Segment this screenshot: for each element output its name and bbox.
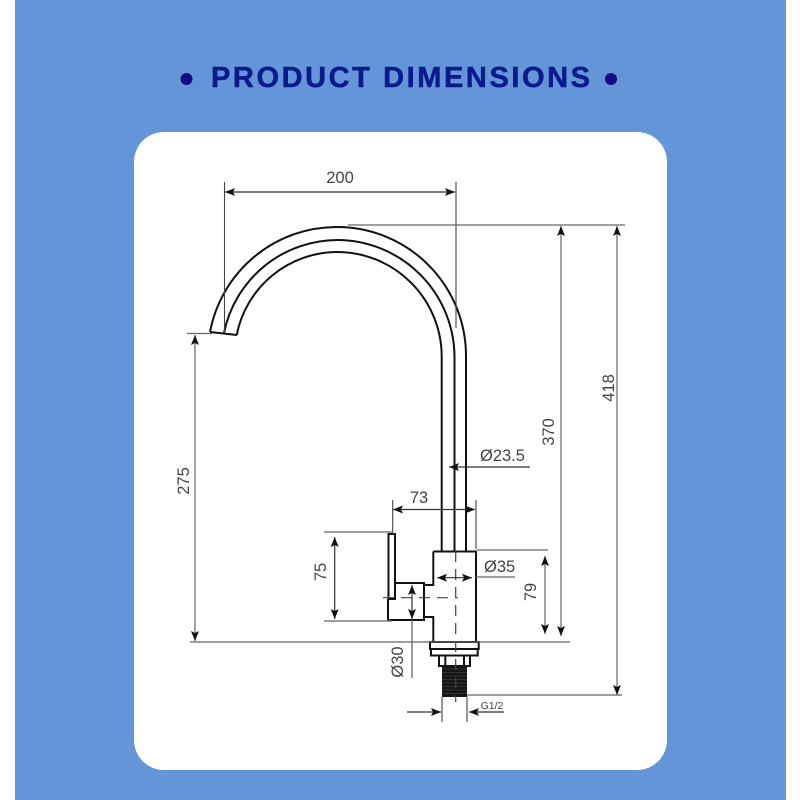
dimension: 79: [477, 550, 548, 634]
panel: drawing card: [134, 132, 667, 770]
dimension: G1/2 thread: G1/2: [481, 700, 504, 712]
dimension: 23.5 diameter: [449, 447, 530, 467]
dimension: 73: [393, 489, 476, 549]
dimension: 79: 79: [522, 583, 540, 601]
dimension: 418 height: 418: [600, 374, 618, 402]
dimension: 30 diameter: [389, 585, 412, 678]
dimension: 75: 75: [312, 563, 330, 581]
dimension: 275 height: [175, 334, 570, 642]
dimension: 30 diameter: Ø30: [389, 646, 407, 678]
faucet spout: [210, 227, 466, 551]
dimension: 35 diameter: [437, 558, 515, 578]
dimension: 75: [312, 532, 392, 621]
dimension: 418 height: [348, 225, 625, 695]
faucet flange: [430, 642, 479, 666]
dimension: 275 height: 275: [175, 467, 193, 495]
faucet body: [388, 552, 476, 642]
threaded connector: [442, 666, 467, 697]
centre lines: [383, 551, 458, 702]
dimension: 200 width: 200: [326, 169, 354, 187]
dimension: 370 height: 370: [540, 418, 558, 446]
dimension: G1/2 thread: [407, 697, 504, 722]
dimension: 200 width: [224, 169, 456, 333]
dimension: 35 diameter: Ø35: [484, 558, 515, 576]
title: PRODUCT DIMENSIONS: [211, 62, 590, 94]
faucet drawing: [210, 227, 479, 702]
faucet handle: [388, 534, 395, 599]
dimension: 23.5 diameter: Ø23.5: [480, 447, 525, 465]
dimension: 73: 73: [410, 489, 428, 507]
